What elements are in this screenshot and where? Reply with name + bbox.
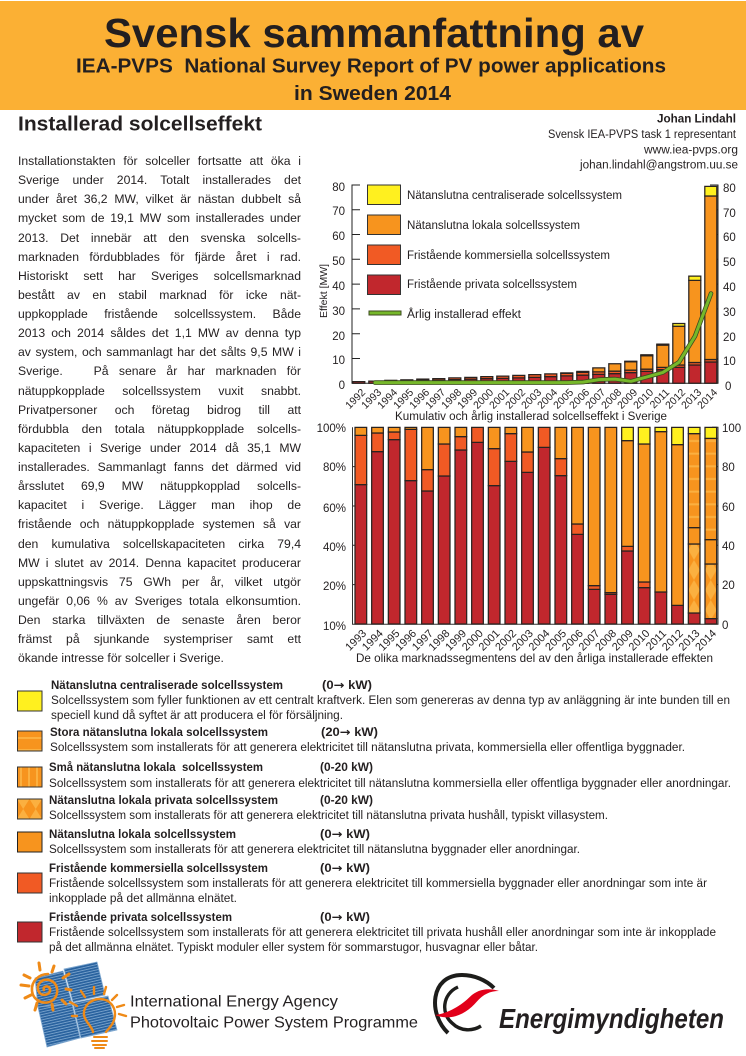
segment: off-grid commercial: Fristående solcellssystem som installerats för att generera elektricitet till kommersiella byggnader eller anordningar som inte är <box>49 878 707 890</box>
x axis years: 1996 <box>393 628 419 653</box>
segment: grid-connected local private: Solcellssystem som installerats för att generera elektricitet till nätanslutna privata hushåll, typiskt villasystem. <box>49 810 608 822</box>
left percent labels: 10% <box>323 621 346 633</box>
segment: central grid-connected <box>18 678 730 722</box>
x axis years: 1993 <box>343 628 369 653</box>
left axis labels: 50 <box>332 256 345 268</box>
icon: solar panels <box>35 962 117 1047</box>
body text: Sverige. På senare år har marknaden för <box>18 364 301 378</box>
x axis years: 2010 <box>631 387 656 412</box>
body text: bestått av en stabil marknad för icke nät- <box>18 288 301 302</box>
x axis years: 2007 <box>583 387 608 412</box>
chart legend <box>368 185 622 321</box>
right axis labels <box>723 183 736 393</box>
left axis labels <box>332 182 345 392</box>
x axis years: 2014 <box>693 628 719 653</box>
x axis years: 1999 <box>443 628 469 653</box>
x axis years: 2003 <box>510 628 536 653</box>
author block <box>548 114 738 172</box>
body text: uppskattningsvis 75 GWh per år, vilket utgör <box>18 575 301 589</box>
body text: nätuppkopplade solcellssystem vuxit snabbt. <box>18 384 301 398</box>
x axis years: 2006 <box>567 387 592 412</box>
x axis years: 2000 <box>460 628 486 653</box>
right axis labels: 60 <box>723 232 736 244</box>
segment: off-grid commercial: (0→ kW) <box>320 861 370 875</box>
segment: grid-connected local: Nätanslutna lokala solcellssystem <box>49 829 236 841</box>
segment: grid-connected local private: (0-20 kW) <box>320 795 373 807</box>
segment: central grid-connected: (0→ kW) <box>322 678 372 692</box>
author block: www.iea-pvps.org <box>643 144 738 156</box>
right axis labels: 50 <box>723 257 736 269</box>
x axis years: 2005 <box>543 628 569 653</box>
left percent labels: 100% <box>317 423 346 435</box>
x axis years: 1995 <box>391 387 416 412</box>
right axis labels: 0 <box>722 620 728 632</box>
x axis years: 1998 <box>427 628 452 653</box>
right axis labels: 40 <box>723 282 736 294</box>
x axis years: 1996 <box>407 387 432 412</box>
body text: uppkopplade fristående solcellssystem. Både <box>18 307 301 321</box>
right axis labels: 100 <box>722 423 741 435</box>
organisation name: International Energy Agency <box>130 994 338 1010</box>
x axis years: 2009 <box>610 628 636 653</box>
x axis years: 1999 <box>455 387 480 412</box>
x axis years: 2008 <box>593 628 619 653</box>
segment: large grid-connected local: Stora nätanslutna lokala solcellssystem <box>50 727 268 739</box>
icon: sun <box>21 963 71 1010</box>
x axis years: 2010 <box>627 628 652 653</box>
body text: marknaden fördubblades för fjärde året i rad. <box>18 250 301 264</box>
left axis labels: 70 <box>332 206 345 218</box>
panel: segment definitions <box>18 678 731 954</box>
axes <box>352 185 718 383</box>
segment: off-grid private: (0→ kW) <box>320 910 370 924</box>
annual installed power line <box>375 294 711 383</box>
right axis labels: 10 <box>723 356 736 368</box>
left axis labels: 40 <box>332 281 345 293</box>
author block: johan.lindahl@angstrom.uu.se <box>579 160 738 172</box>
left percent labels: 20% <box>323 581 346 593</box>
segment: central grid-connected: speciell kund då syftet är att producera el för försäljning. <box>51 710 343 722</box>
right axis labels: 60 <box>722 502 735 514</box>
logo: IEA PVPS <box>21 962 418 1048</box>
segment: small grid-connected local: Solcellssystem som installerats för att generera elektricitet till nätanslutna kommersiella eller offentliga byggnader eller anordningar. <box>49 778 731 790</box>
chart legend: Nätanslutna centraliserade solcellssystem <box>407 190 622 202</box>
x axis years: 2011 <box>648 387 672 411</box>
chart: cumulative and annual installed PV power <box>318 182 736 412</box>
body text: den kumulativa solcellskapaciteten cirka 79,4 <box>18 536 301 550</box>
right axis labels: 30 <box>723 307 736 319</box>
right axis labels: 70 <box>723 208 736 220</box>
body text: ökande intresse för solceller i Sverige. <box>18 651 224 665</box>
y axis title: Effekt [MW] <box>318 264 330 318</box>
left axis labels: 10 <box>332 355 345 367</box>
x axis years: 2012 <box>660 628 686 653</box>
x axis years: 2011 <box>644 628 669 653</box>
x axis years: 1997 <box>410 628 436 653</box>
body text: främst på sjunkande systempriser samt ett <box>18 632 301 646</box>
left percent labels: 40% <box>323 542 346 554</box>
chart legend: Nätanslutna lokala solcellssystem <box>407 220 580 232</box>
segment: grid-connected local: Solcellssystem som installerats för att generera elektricitet till nätanslutna byggnader eller anordningar. <box>49 844 580 856</box>
x axis years <box>343 387 720 412</box>
body text: under året 36,2 MW, vilket är nästan dubbelt så <box>18 192 301 206</box>
chart legend: Fristående kommersiella solcellssystem <box>407 250 610 262</box>
x axis years: 2002 <box>503 387 528 412</box>
organisation name: Photovoltaic Power System Programme <box>130 1014 418 1032</box>
x axis years: 2002 <box>493 628 519 653</box>
author block: Johan Lindahl <box>657 114 736 126</box>
x axis years: 2001 <box>487 387 512 412</box>
subtitle: in Sweden 2014 <box>294 83 452 105</box>
body text <box>18 154 302 665</box>
x axis years: 2009 <box>615 387 640 412</box>
chart: share of market segments <box>317 423 741 653</box>
right axis labels: 80 <box>723 183 736 195</box>
icon: swoosh <box>435 975 499 1033</box>
left percent labels <box>317 423 346 633</box>
body text: kapacitet i Sverige. Lägger man ihop de <box>18 498 301 512</box>
right axis labels: 20 <box>722 580 735 592</box>
body text: Historiskt sett har Sveriges solcellsmarknad <box>18 269 301 283</box>
segment: off-grid commercial: inkopplade på det allmänna elnätet. <box>49 893 237 905</box>
body text: Privatpersoner och företag bidrog till att <box>18 403 301 417</box>
right axis labels: 80 <box>722 462 735 474</box>
segment: large grid-connected local: Solcellssystem som installerats för att generera elektricitet till nätanslutna privata, kommersiella eller offentliga byggnader. <box>50 742 685 754</box>
x axis years: 2000 <box>471 387 496 412</box>
percent bars <box>355 427 717 624</box>
x axis years <box>343 628 719 653</box>
left percent labels: 80% <box>323 462 346 474</box>
body text: av system, och sammanlagt har det sålts 9,5 MW i <box>18 345 301 359</box>
body text: kapaciteten i Sverige under 2014 då 35,1 MW <box>18 441 301 455</box>
segment: off-grid private: Fristående privata solcellssystem <box>49 912 232 924</box>
body text: installerades. Sammanlagt fanns det därmed vid <box>18 460 301 474</box>
segment: grid-connected local: (0→ kW) <box>320 827 370 841</box>
subtitle: IEA-PVPS National Survey Report of PV power applications <box>76 56 666 78</box>
x axis years: 2012 <box>663 387 688 412</box>
x axis years: 2004 <box>535 387 560 412</box>
header banner <box>0 1 746 110</box>
x axis years: 2014 <box>695 387 720 412</box>
body text: Installationstakten för solceller fortsatte att öka i <box>18 154 301 168</box>
icon: light bulb <box>70 987 126 1048</box>
body text: Sverige under 2014. Totalt installerades det <box>18 173 301 187</box>
segment: small grid-connected local: (0-20 kW) <box>320 762 373 774</box>
right axis labels: 20 <box>723 332 736 344</box>
x axis years: 2006 <box>560 628 586 653</box>
x axis years: 2003 <box>519 387 544 412</box>
right axis labels: 0 <box>725 381 731 393</box>
organisation name <box>130 994 418 1032</box>
segment: large grid-connected local: (20→ kW) <box>321 725 378 739</box>
segment: small grid-connected local: Små nätanslutna lokala solcellssystem <box>49 762 263 774</box>
body text: 2013. Det innebär att den svenska solcells- <box>18 230 301 244</box>
section heading: Installerad solcellseffekt <box>18 114 262 136</box>
right axis labels: 40 <box>722 541 735 553</box>
x axis years: 2007 <box>577 628 602 653</box>
left axis labels: 0 <box>339 380 345 392</box>
segment: central grid-connected: Solcellssystem som fyller funktionen av ett centralt kraftverk. Elen som genereras av denna typ av anläggning är inte bunden till en <box>51 695 730 707</box>
right axis labels <box>722 423 741 632</box>
left axis labels: 30 <box>332 306 345 318</box>
cumulative stacked bars <box>353 186 717 383</box>
segment: grid-connected local private: Nätanslutna lokala privata solcellssystem <box>49 795 278 807</box>
x axis years: 2008 <box>599 387 624 412</box>
title: Svensk sammanfattning av <box>104 10 644 56</box>
chart caption 2: De olika marknadssegmentens del av den årliga installerade effekten <box>356 651 713 665</box>
segment: grid-connected local private <box>18 795 608 822</box>
x axis years: 2001 <box>477 628 502 653</box>
x axis years: 1994 <box>375 387 400 412</box>
body text: mycket som de 19,1 MW som installerades under <box>18 211 301 225</box>
x axis years: 1998 <box>439 387 464 412</box>
segment: off-grid private: Fristående solcellssystem som installerats för att generera elektricitet till privata hushåll eller anordningar som inte är inkopplade <box>49 927 716 939</box>
chart legend: Årlig installerad effekt <box>407 308 522 321</box>
body text: MW i slutet av 2014. Denna kapacitet producerar <box>18 556 301 570</box>
left axis labels: 20 <box>332 331 345 343</box>
body text: 2013 och 2014 såldes det 1,1 MW av denna typ <box>18 326 301 340</box>
left percent labels: 60% <box>323 503 346 515</box>
body text: årsslutet 69,9 MW nätuppkopplad solcells- <box>18 479 301 493</box>
author block: Svensk IEA-PVPS task 1 representant <box>548 129 737 141</box>
logo: Energimyndigheten <box>435 975 724 1034</box>
x axis years: 1995 <box>377 628 402 653</box>
segment: large grid-connected local <box>18 725 685 754</box>
x axis years: 2005 <box>551 387 576 412</box>
x axis years: 1997 <box>423 387 448 412</box>
left axis labels: 80 <box>332 182 345 194</box>
x axis years: 1993 <box>359 387 384 412</box>
segment: grid-connected local <box>18 827 580 856</box>
subtitle <box>76 56 666 105</box>
segment: small grid-connected local <box>18 762 731 790</box>
body text: fördubbla den totala nätuppkopplade solcells- <box>18 422 301 436</box>
body text: Den starka tillväxten de senaste åren beror <box>18 613 301 627</box>
chart legend: Fristående privata solcellssystem <box>407 279 577 291</box>
axes <box>352 427 718 624</box>
body text: fristående och nätuppkopplade systemen så var <box>18 517 301 531</box>
left axis labels: 60 <box>332 231 345 243</box>
segment: off-grid private <box>18 910 716 954</box>
x axis years: 2004 <box>527 628 552 653</box>
segment: off-grid commercial: Fristående kommersiella solcellssystem <box>49 863 268 875</box>
x axis years: 1994 <box>360 628 386 653</box>
body text: ungefär 0,06 % av Sveriges totala elkonsumtion. <box>18 594 301 608</box>
x axis years: 1992 <box>343 387 368 412</box>
segment: central grid-connected: Nätanslutna centraliserade solcellssystem <box>51 680 283 692</box>
x axis years: 2013 <box>677 628 702 653</box>
x axis years: 2013 <box>679 387 704 412</box>
segment: off-grid commercial <box>18 861 707 905</box>
chart caption 1: Kumulativ och årlig installerad solcellseffekt i Sverige <box>395 411 667 423</box>
segment: off-grid private: på det allmänna elnätet. Typiskt moduler eller system för sommarstugor, husvagnar eller båtar. <box>49 942 538 954</box>
